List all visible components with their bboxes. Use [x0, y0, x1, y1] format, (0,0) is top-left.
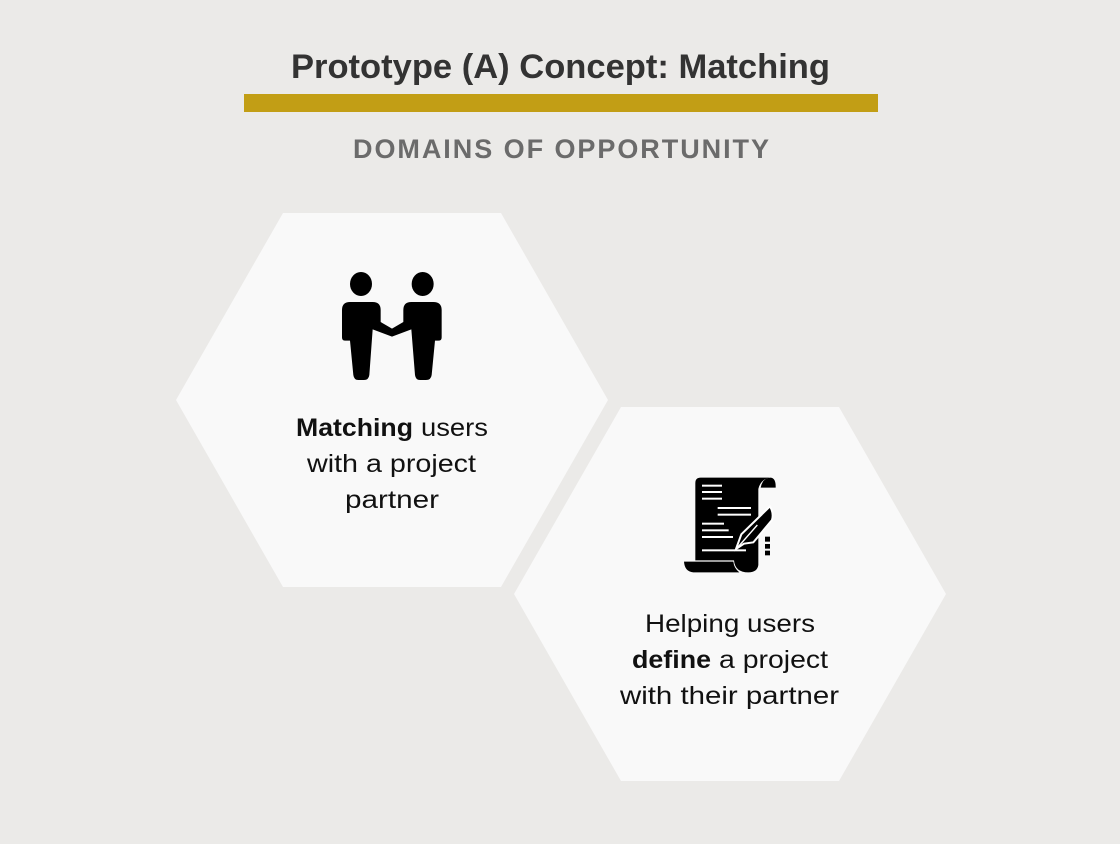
text: matching users with a project partner: partner	[345, 486, 439, 514]
text: helping users define a project with their partner: with their partner	[619, 682, 839, 710]
text: matching users with a project partner	[296, 414, 488, 514]
text: helping users define a project with their partner	[619, 610, 839, 710]
text: matching users with a project partner: users	[421, 414, 488, 442]
icon: scroll and quill	[684, 478, 776, 572]
panel: define hexagon	[514, 407, 946, 781]
title: Prototype (A) Concept: Matching	[291, 48, 830, 86]
text: helping users define a project with their partner: Helping users	[645, 610, 815, 638]
icon: two people shaking hands	[342, 272, 442, 380]
subtitle: DOMAINS OF OPPORTUNITY	[353, 134, 769, 164]
text: helping users define a project with their partner: define	[632, 646, 711, 674]
gold title bar	[244, 94, 878, 112]
text: matching users with a project partner: with a project	[306, 450, 476, 478]
text: helping users define a project with their partner: a project	[719, 646, 828, 674]
panel: matching hexagon	[176, 213, 608, 587]
text: matching users with a project partner: Matching	[296, 414, 413, 442]
